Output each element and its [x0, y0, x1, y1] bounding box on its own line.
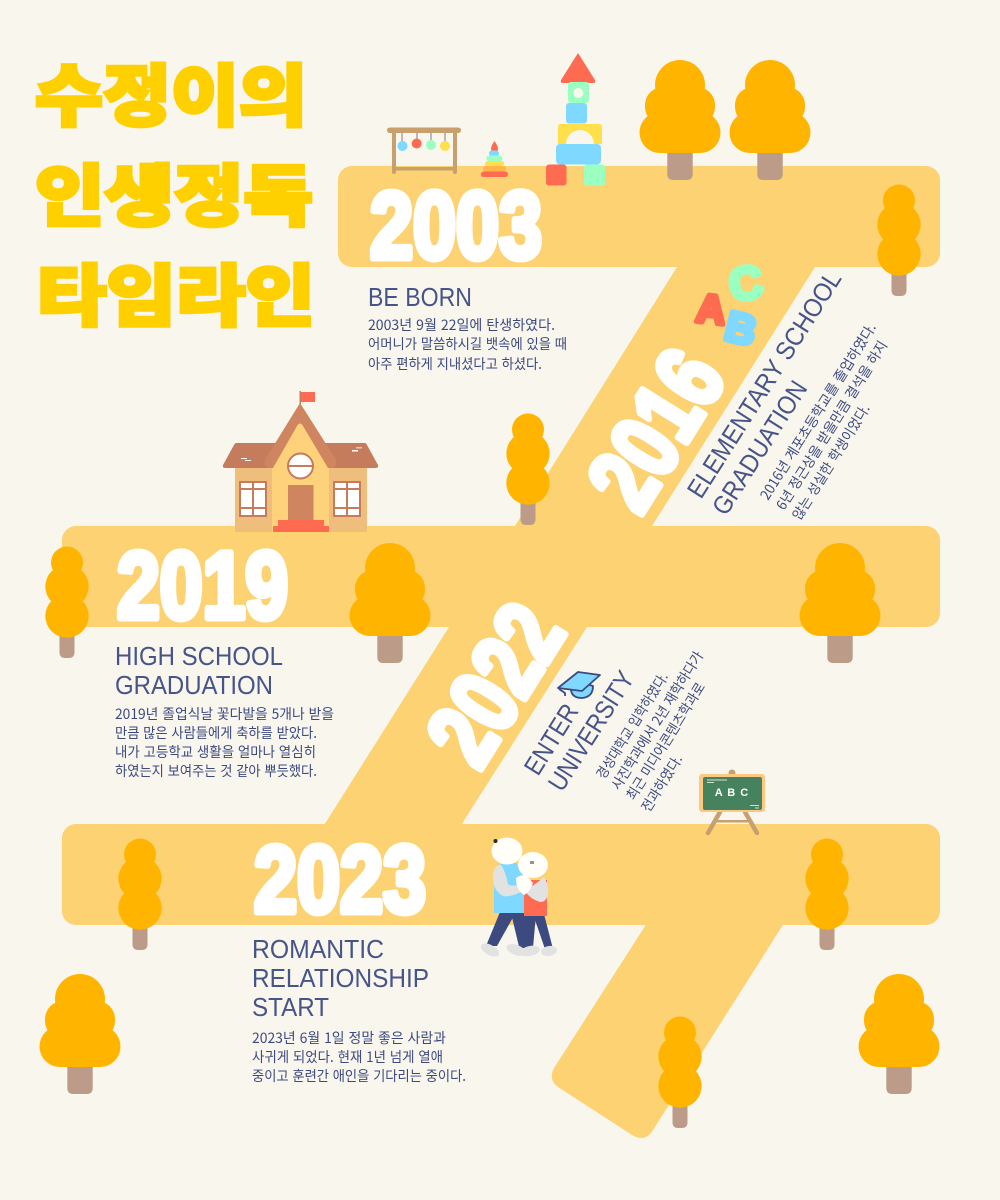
text: 2023 description: 사귀게 되었다. 현재 1년 넘게 열애 — [252, 1047, 443, 1067]
title — [35, 60, 315, 335]
text: 2003 description: 2003년 9월 22일에 탄생하였다. — [368, 315, 555, 335]
text: 2016 description: 6년 정근상을 받을만큼 결석을 하지 — [771, 337, 892, 514]
text: 2016 description: 않는 성실한 학생이었다. — [787, 400, 875, 524]
heading: high school graduation — [115, 641, 283, 700]
text: 2022 description: 전과하였다. — [636, 751, 687, 816]
small tree — [658, 1016, 702, 1128]
small tree — [506, 414, 550, 525]
tree — [40, 974, 120, 1094]
heading: enter university: UNIVERSITY — [542, 665, 640, 796]
heading: enter university: ENTER — [518, 698, 584, 780]
year 2022: 2022 — [407, 586, 585, 783]
text: 2019 description: 하였는지 보여주는 것 같아 뿌듯했다. — [115, 761, 317, 781]
heading: high school graduation: GRADUATION — [115, 670, 273, 700]
text: 2016 description: 2016년 계포초등학교를 졸업하였다. — [755, 319, 881, 504]
heading: enter university — [518, 665, 640, 796]
tree — [730, 60, 810, 180]
icon: chalkboard: A B C — [715, 787, 749, 799]
tree — [858, 974, 940, 1094]
year 2016: 2016 — [568, 332, 745, 528]
year 2003: 2003 — [370, 173, 542, 279]
heading: elementary school graduation: GRADUATION — [706, 375, 813, 520]
small tree — [118, 838, 162, 950]
text: 2022 description: 최근 미디어콘텐츠학과로 — [621, 678, 710, 804]
title: 인생정독 — [35, 160, 313, 235]
small tree — [877, 184, 921, 296]
text: 2022 description: 사진학과에서 2년 재학하다가 — [606, 647, 708, 794]
text: 2003 description — [368, 315, 567, 374]
year 2023: 2023 — [254, 827, 426, 933]
title: 타임라인 — [37, 260, 315, 335]
icon: graduation cap — [558, 672, 600, 698]
icon: baby mobile — [387, 128, 461, 174]
heading: high school graduation: HIGH SCHOOL — [115, 641, 283, 671]
heading: romantic relationship start: RELATIONSHIP — [252, 963, 429, 993]
text: 2003 description: 아주 편하게 지내셨다고 하셨다. — [368, 354, 542, 374]
icon: abc letters: C — [726, 255, 766, 311]
icon: school building — [223, 391, 378, 532]
icon: toy blocks tower — [546, 53, 605, 186]
text: 2023 description: 중이고 훈련간 애인을 기다리는 중이다. — [252, 1066, 466, 1086]
text: 2019 description: 만큼 많은 사람들에게 축하를 받았다. — [115, 723, 317, 743]
heading: elementary school graduation: ELEMENTARY SCHOOL — [681, 265, 847, 503]
text: 2019 description: 2019년 졸업식날 꽃다발을 5개나 받을 — [115, 704, 334, 724]
icon: abc letters — [694, 255, 766, 355]
text: 2023 description: 2023년 6월 1일 정말 좋은 사람과 — [252, 1028, 446, 1048]
text: 2019 description: 내가 고등학교 생활을 얼마나 열심히 — [115, 742, 316, 762]
text: 2003 description: 어머니가 말씀하시길 뱃속에 있을 때 — [368, 334, 567, 354]
heading: be born: BE BORN — [368, 282, 472, 312]
small tree — [805, 838, 849, 950]
timeline road — [62, 166, 940, 1138]
text: 2019 description — [115, 704, 334, 781]
small tree — [45, 546, 89, 658]
text: 2022 description: 경성대학교 입학하였다. — [591, 669, 673, 783]
title: 수정이의 — [35, 60, 307, 135]
year 2019: 2019 — [117, 533, 288, 639]
heading: romantic relationship start: ROMANTIC — [252, 934, 384, 964]
icon: ring stack toy — [481, 141, 508, 177]
icon: chalkboard — [699, 770, 765, 833]
icon: couple walking — [479, 838, 558, 959]
text: 2023 description — [252, 1028, 466, 1086]
tree — [800, 543, 880, 663]
heading: romantic relationship start — [252, 934, 429, 1022]
heading: romantic relationship start: START — [252, 992, 329, 1022]
icon: abc letters: B — [720, 302, 761, 355]
icon: abc letters: A — [694, 287, 728, 333]
tree — [350, 543, 430, 663]
tree — [640, 60, 720, 180]
